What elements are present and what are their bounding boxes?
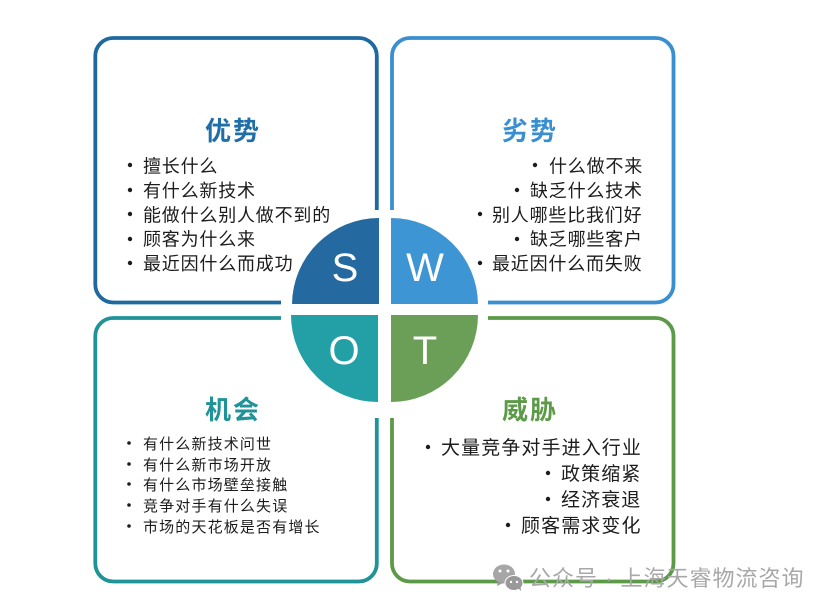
quadrant S: S	[332, 246, 358, 290]
list: threats: 经济衰退	[561, 489, 641, 511]
list: opportunities: 有什么新技术问世	[143, 436, 272, 453]
quadrant S	[292, 218, 379, 304]
list: strengths: 能做什么别人做不到的	[143, 206, 331, 226]
list: strengths: 擅长什么	[143, 156, 218, 176]
quadrant T: T	[413, 329, 437, 373]
list: threats	[426, 437, 642, 537]
list: opportunities: 市场的天花板是否有增长	[143, 518, 321, 536]
watermark	[493, 564, 805, 591]
list: weaknesses: 什么做不来	[549, 156, 643, 176]
list: strengths: 有什么新技术	[143, 181, 256, 201]
panel border: opportunities	[95, 318, 377, 582]
quadrant W: W	[406, 246, 444, 290]
list: weaknesses	[478, 156, 643, 274]
heading: opportunities: 机会	[205, 395, 261, 425]
list: opportunities: 竞争对手有什么失误	[143, 497, 288, 515]
list: threats: 顾客需求变化	[521, 515, 642, 537]
list: threats: 政策缩紧	[561, 463, 641, 485]
panel: opportunities	[95, 318, 377, 582]
quadrant O: O	[328, 329, 360, 373]
list: weaknesses: 别人哪些比我们好	[492, 206, 642, 226]
quadrant T	[391, 315, 478, 402]
center circle: SWOT quadrants	[291, 218, 478, 402]
heading: threats: 威胁	[502, 395, 558, 425]
panel: strengths	[95, 38, 377, 302]
watermark text: 公众号 · 上海天睿物流咨询	[529, 566, 805, 591]
icon: wechat logo	[493, 564, 523, 591]
list: strengths: 最近因什么而成功	[143, 254, 293, 274]
panel: threats	[392, 318, 674, 582]
list: threats: 大量竞争对手进入行业	[441, 437, 642, 459]
list: weaknesses: 最近因什么而失败	[492, 254, 642, 274]
panel: weaknesses	[392, 38, 674, 302]
heading: strengths: 优势	[205, 116, 261, 146]
quadrant W	[391, 218, 478, 304]
list: strengths	[128, 156, 331, 274]
heading: weaknesses: 劣势	[502, 116, 558, 146]
list: opportunities	[127, 436, 321, 536]
panel border: threats	[392, 318, 674, 582]
list: strengths: 顾客为什么来	[143, 230, 256, 250]
panel border: strengths	[95, 38, 377, 302]
list: opportunities: 有什么新市场开放	[143, 457, 272, 474]
list: opportunities: 有什么市场壁垒接触	[143, 477, 288, 494]
quadrant O	[291, 315, 378, 402]
list: weaknesses: 缺乏哪些客户	[530, 230, 643, 250]
list: weaknesses: 缺乏什么技术	[530, 181, 643, 201]
panel border: weaknesses	[392, 38, 674, 302]
